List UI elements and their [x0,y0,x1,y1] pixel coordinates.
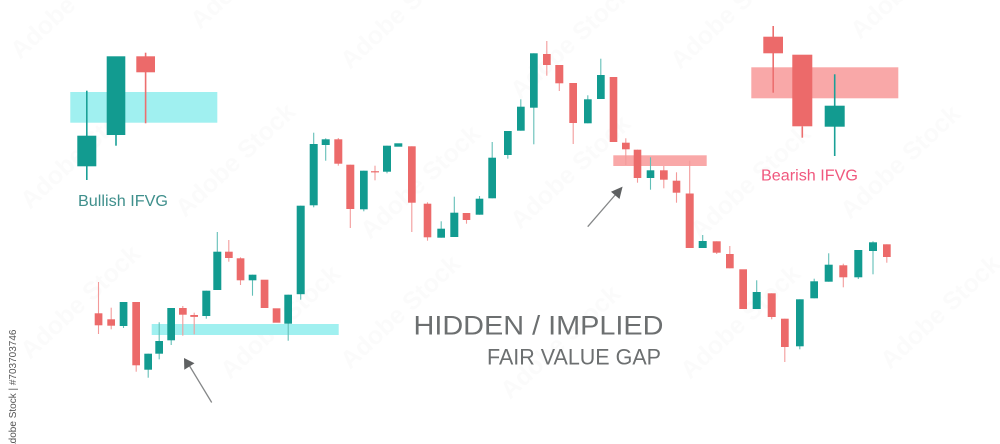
candle: bullish low [77,91,96,180]
watermark pattern: Adobe Stock [675,260,806,384]
watermark pattern: Adobe Stock [835,100,966,224]
label: Bullish IFVG: Bullish IFVG [78,193,168,210]
panel: bearish IFVG example [751,26,898,184]
title [414,310,664,369]
watermark pattern: Adobe Stock [495,280,626,404]
candle: bullish retest [825,74,845,156]
candles: decline through bearish gap [622,138,694,248]
candlestick chart [95,41,891,378]
watermark pattern: Adobe Stock [355,120,486,244]
panel: bullish IFVG example [70,53,217,210]
heading: Hidden / Implied: HIDDEN / IMPLIED [414,310,664,340]
label: Bearish IFVG: Bearish IFVG [761,168,858,184]
candles: second rally to peak [476,53,538,215]
candles: peak distribution [543,41,617,144]
candles: pullback into gap [225,240,292,341]
candles: opening decline and bottom [95,282,152,378]
arrow: pointing to bullish gap [184,358,212,402]
candles: first rally [155,232,221,359]
watermark pattern: Adobe Stock [335,250,466,374]
candles: decline to low [699,235,789,362]
candles: impulse and first top [297,133,402,300]
bullish gap zone [70,92,217,123]
arrow: pointing to bearish gap [588,187,623,227]
candle: bullish large [107,56,125,146]
watermark pattern: Adobe Stock [685,120,816,244]
candles: final recovery [796,241,891,349]
watermark pattern: Adobe Stock [505,110,636,234]
watermark pattern: Adobe Stock [15,240,146,364]
watermark pattern: Adobe Stock [215,260,346,384]
candle: bearish high [763,26,783,93]
watermark pattern: Adobe Stock [170,98,301,222]
bullish gap zone on chart [152,324,339,335]
bearish gap zone on chart [613,155,707,166]
candle: bearish large [792,55,812,138]
watermark pattern: Adobe Stock [15,90,146,214]
bearish gap zone [751,67,898,98]
candles: correction and base [408,146,470,241]
subheading: Fair Value Gap: FAIR VALUE GAP [487,344,661,369]
candle: bearish small [136,53,155,123]
